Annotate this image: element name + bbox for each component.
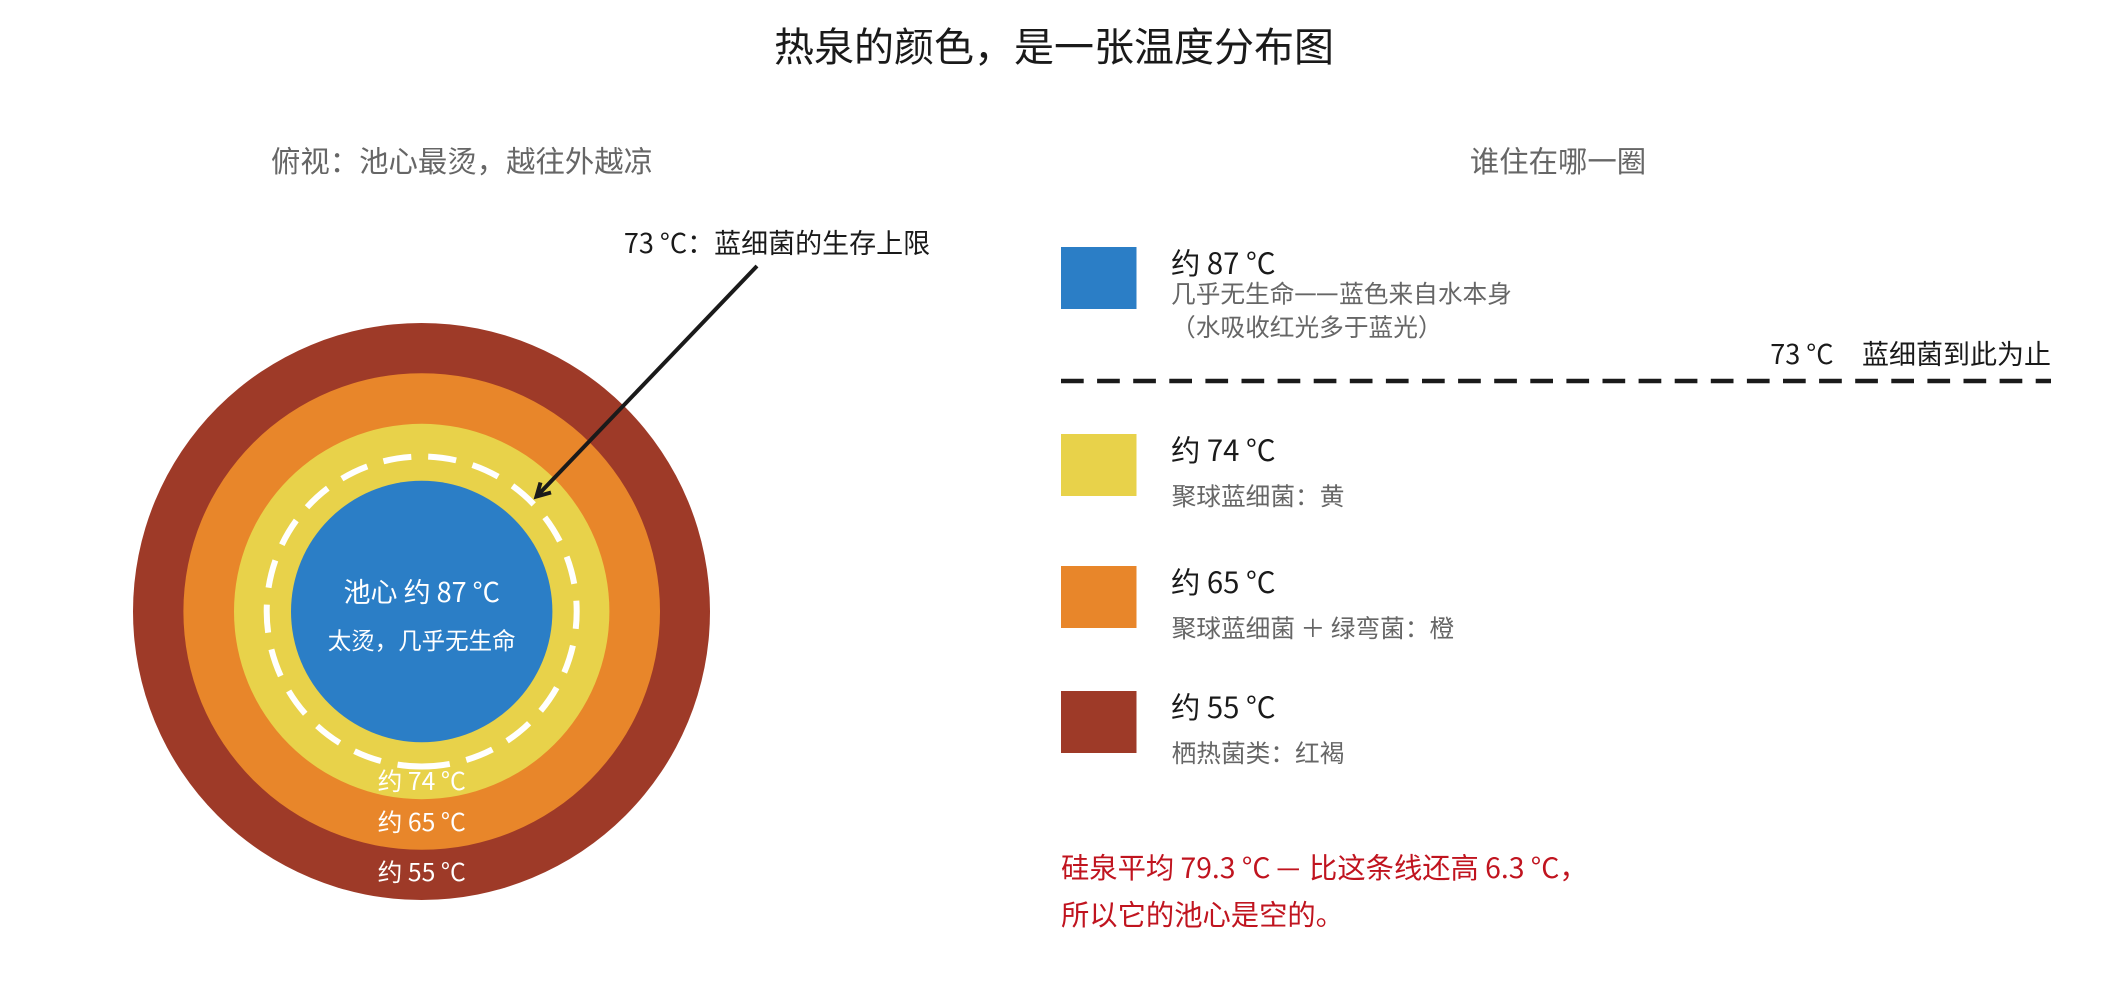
threshold label: 73 °C 蓝细菌到此为止 bbox=[1770, 333, 2051, 372]
callout text: 73 °C：蓝细菌的生存上限 bbox=[624, 222, 930, 261]
legend row: 87 °C bbox=[1061, 241, 1512, 344]
description: 栖热菌类：红褐 bbox=[1172, 734, 1344, 770]
temperature: 约 55 °C bbox=[1171, 685, 1275, 727]
label: 55 °C: 约 55 °C bbox=[378, 853, 466, 889]
swatch: orange bbox=[1061, 566, 1136, 628]
temperature: 约 87 °C bbox=[1171, 241, 1275, 283]
right heading: 谁住在哪一圈 bbox=[1470, 139, 1646, 181]
left heading: 俯视：池心最烫，越往外越凉 bbox=[271, 139, 653, 181]
threshold dashed line bbox=[1061, 379, 2051, 383]
swatch: blue bbox=[1061, 247, 1136, 309]
description second line: （水吸收红光多于蓝光） bbox=[1171, 308, 1443, 344]
core: about 87 °C bbox=[291, 481, 552, 742]
conclusion note: 所以它的池心是空的。 bbox=[1061, 893, 1344, 934]
swatch: yellow bbox=[1061, 434, 1136, 496]
legend row: 55 °C bbox=[1061, 685, 1344, 770]
73 °C dashed boundary bbox=[267, 456, 577, 766]
title: 热泉的颜色，是一张温度分布图 bbox=[774, 15, 1334, 73]
temperature: 约 74 °C bbox=[1171, 428, 1275, 470]
core sublabel: 太烫，几乎无生命 bbox=[328, 622, 516, 656]
core label: 池心 约 87 °C bbox=[344, 571, 500, 610]
ring: about 74 °C bbox=[234, 424, 609, 799]
concentric temperature diagram bbox=[133, 323, 710, 900]
conclusion note bbox=[1061, 846, 1588, 934]
temperature: 约 65 °C bbox=[1171, 560, 1275, 602]
description: 几乎无生命 bbox=[1171, 274, 1294, 310]
description: 聚球蓝细菌：黄 bbox=[1172, 477, 1344, 513]
swatch: red-brown bbox=[1061, 691, 1136, 753]
description: 蓝色来自水本身 bbox=[1339, 274, 1512, 310]
description: 聚球蓝细菌 ＋ 绿弯菌：橙 bbox=[1172, 609, 1455, 645]
conclusion note: 比这条线还高 6.3 °C， bbox=[1303, 846, 1588, 887]
label: 74 °C: 约 74 °C bbox=[378, 762, 466, 798]
ring: about 55 °C bbox=[133, 323, 710, 900]
label: 65 °C: 约 65 °C bbox=[378, 803, 466, 839]
legend row: 74 °C bbox=[1061, 428, 1344, 513]
arrow to boundary bbox=[536, 266, 757, 496]
legend row: 65 °C bbox=[1061, 560, 1455, 645]
conclusion note: — bbox=[1278, 857, 1299, 880]
ring: about 65 °C bbox=[183, 373, 660, 850]
description: —— bbox=[1295, 283, 1339, 305]
conclusion note: 硅泉平均 79.3 °C bbox=[1061, 846, 1270, 887]
